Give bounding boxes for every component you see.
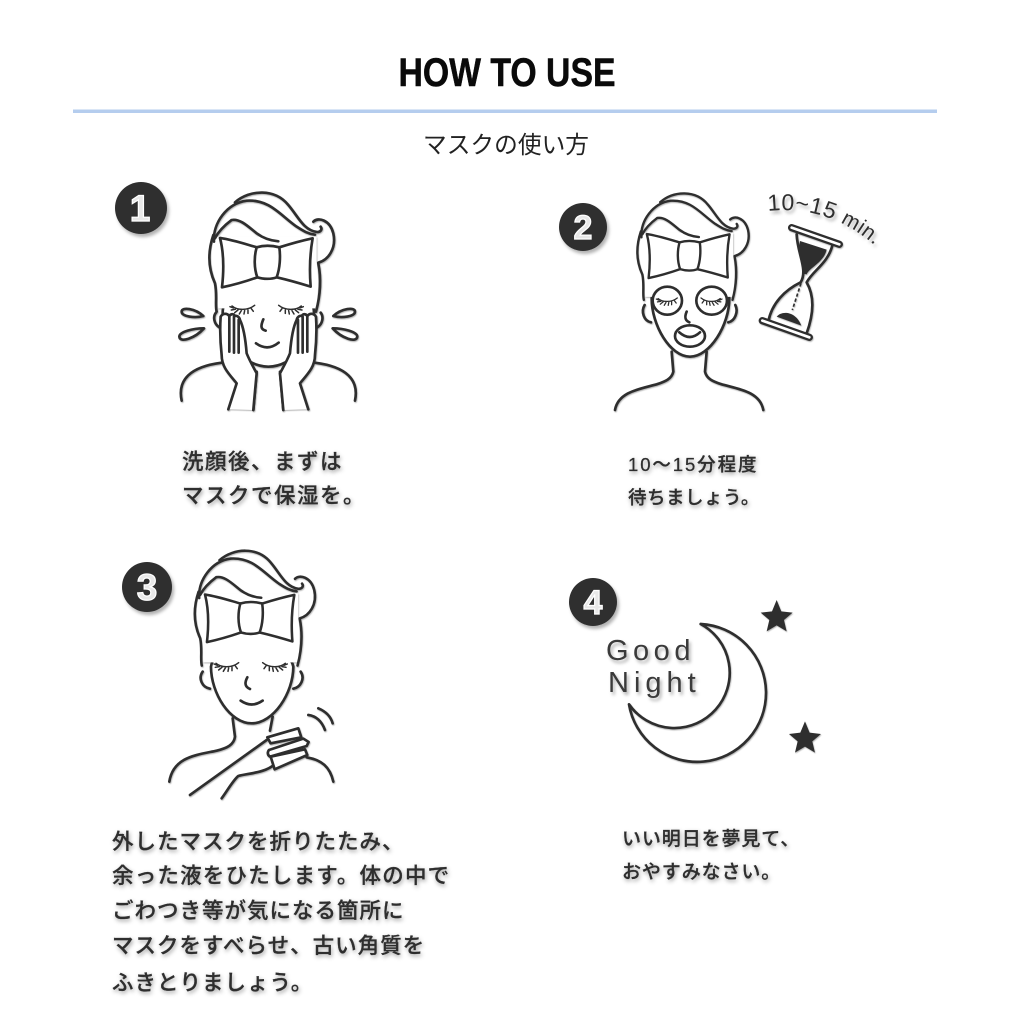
step 3 text bbox=[112, 830, 450, 995]
step 3 badge bbox=[122, 562, 172, 612]
step 4 text: おやすみなさい。 bbox=[622, 861, 781, 883]
duration label: 10~15 min.: 10~15 min. bbox=[769, 194, 878, 248]
step 4 badge bbox=[569, 578, 617, 626]
step 2 text: 10～15分程度 bbox=[628, 454, 757, 475]
step 3 text: ごわつき等が気になる箇所に bbox=[112, 899, 405, 923]
subtitle: マスクの使い方 bbox=[423, 132, 589, 159]
step 1 text bbox=[182, 450, 366, 508]
step 4 text bbox=[622, 828, 800, 883]
step 2 illustration: woman wearing mask patches bbox=[615, 193, 839, 410]
step 1 badge: 1 bbox=[130, 188, 150, 229]
step 1 illustration: woman patting face bbox=[179, 193, 357, 410]
good night lettering: Night bbox=[608, 667, 701, 699]
step 2 badge bbox=[559, 203, 607, 251]
step 1 text: 洗顔後、まずは bbox=[182, 450, 343, 474]
step 1 badge bbox=[115, 182, 167, 234]
step 3 text: 余った液をひたします。体の中で bbox=[112, 864, 450, 888]
step 2 badge: 2 bbox=[574, 209, 592, 247]
step 3 text: マスクをすべらせ、古い角質を bbox=[112, 934, 425, 958]
step 3 badge: 3 bbox=[137, 567, 157, 608]
step 2 text: 待ちましょう。 bbox=[628, 487, 760, 508]
step 3 text: 外したマスクを折りたたみ、 bbox=[112, 830, 405, 854]
step 3 illustration: woman wiping neck with folded mask bbox=[169, 551, 333, 798]
title: HOW TO USE bbox=[398, 51, 616, 95]
step 1 text: マスクで保湿を。 bbox=[182, 484, 366, 508]
good night lettering bbox=[606, 635, 701, 699]
good night lettering: Good bbox=[606, 635, 695, 667]
step 2 text bbox=[628, 454, 760, 508]
step 3 text: ふきとりましょう。 bbox=[112, 971, 313, 995]
title rule bbox=[73, 110, 937, 113]
hourglass bbox=[762, 228, 839, 337]
step 4 illustration: moon and stars bbox=[629, 600, 821, 762]
step 4 text: いい明日を夢見て、 bbox=[622, 828, 800, 850]
step 4 badge: 4 bbox=[584, 584, 603, 622]
